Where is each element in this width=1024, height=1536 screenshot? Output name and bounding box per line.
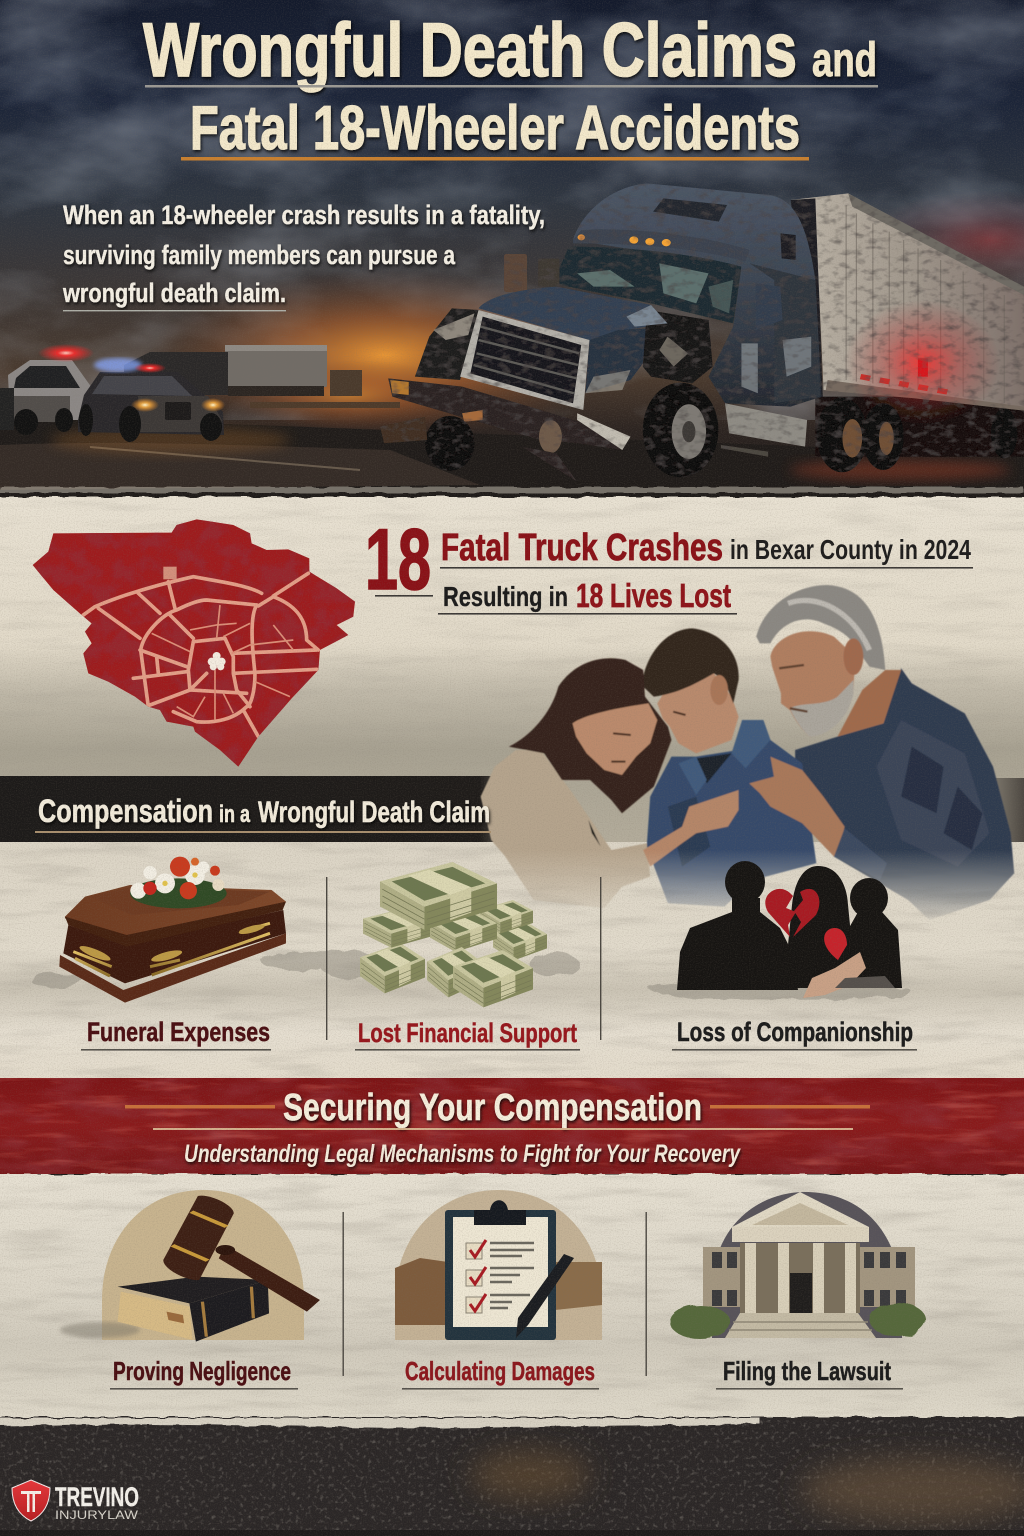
title: Fatal 18-Wheeler Accidents <box>190 94 800 163</box>
center flower marker <box>208 652 226 670</box>
man's hand <box>749 757 887 880</box>
heading: securing your compensation: Securing Your Compensation <box>283 1087 702 1129</box>
label: filing the lawsuit: Filing the Lawsuit <box>723 1356 891 1386</box>
label: loss of companionship: Loss of Companionship <box>677 1017 913 1047</box>
band: compensation heading background <box>0 776 545 842</box>
title <box>143 8 878 163</box>
intro text: When an 18-wheeler crash results in a fatality, <box>63 200 545 230</box>
label: lost financial support: Lost Financial Support <box>358 1018 577 1048</box>
casket handles <box>73 923 270 976</box>
divider <box>326 877 327 1040</box>
background truck box <box>124 345 400 408</box>
bumper <box>388 378 631 450</box>
background: stormy sky hero <box>0 0 1024 495</box>
heading: compensation in a wrongful death claim: Wrongful Death Claim <box>258 796 490 829</box>
crushed front damage <box>585 328 647 393</box>
divider <box>646 1212 647 1376</box>
title: Wrongful Death Claims <box>143 8 797 93</box>
grille <box>460 310 589 410</box>
man <box>756 585 1014 920</box>
book <box>118 1277 268 1303</box>
label: funeral expenses: Funeral Expenses <box>87 1017 270 1047</box>
logo: Trevino Injury Law: INJURYLAW <box>55 1510 138 1522</box>
woman <box>481 658 739 908</box>
small heart <box>824 928 847 960</box>
icon: casket with flowers <box>59 857 286 1003</box>
title: and <box>812 34 877 87</box>
heading: compensation in a wrongful death claim: in a <box>219 801 250 828</box>
front left wheel <box>425 416 474 471</box>
intro text: wrongful death claim. <box>62 278 286 308</box>
icon: gavel and law book <box>60 1188 320 1342</box>
mechanism labels <box>110 1356 903 1390</box>
fuel tank <box>725 403 807 447</box>
mirrors <box>504 254 782 330</box>
divider <box>342 1212 344 1376</box>
heading: compensation in a wrongful death claim <box>35 793 491 833</box>
headline: 18 fatal truck crashes: 18 Lives Lost <box>576 577 731 614</box>
front police car <box>78 358 225 442</box>
logo: Trevino Injury Law: TREVINO <box>55 1482 139 1512</box>
checklist rows <box>466 1240 534 1313</box>
panel: statistics paper background <box>0 497 1024 847</box>
boy <box>643 628 816 907</box>
divider <box>600 877 601 1040</box>
illustration: wrecked semi truck <box>380 183 1024 482</box>
trailer <box>791 193 1024 458</box>
intro text: surviving family members can pursue a <box>63 240 456 270</box>
headline: 18 fatal truck crashes: Fatal Truck Crashes <box>441 527 723 569</box>
windshield <box>552 247 741 323</box>
emergency vehicles scene <box>0 344 400 442</box>
left fender <box>415 308 479 380</box>
headline: 18 fatal truck crashes: Resulting in <box>443 581 568 612</box>
hood <box>479 287 667 340</box>
icon: shield <box>12 1480 50 1521</box>
pen <box>516 1254 574 1338</box>
rear police car <box>0 344 94 435</box>
compensation labels <box>81 1017 917 1051</box>
heading: compensation in a wrongful death claim: Compensation <box>38 793 213 829</box>
logo: Trevino Injury Law <box>12 1480 139 1522</box>
road network <box>83 573 318 737</box>
headline: 18 fatal truck crashes: 18 <box>365 512 431 608</box>
torn edge: top of paper <box>0 487 1024 493</box>
panel: compensation paper background <box>0 842 1024 1080</box>
handle <box>219 1245 320 1312</box>
child's arm <box>803 952 866 998</box>
headline: 18 fatal truck crashes <box>365 512 973 615</box>
rear wheels <box>817 398 904 472</box>
flowers <box>130 857 227 908</box>
subheading: Understanding Legal Mechanisms to Fight for Your Recovery <box>184 1140 741 1168</box>
icon: clipboard checklist <box>393 1188 605 1342</box>
sleeper details <box>573 198 820 403</box>
label: proving negligence: Proving Negligence <box>113 1356 291 1386</box>
gavel head <box>163 1196 234 1280</box>
road surface <box>0 415 1024 495</box>
illustration: grieving family <box>481 585 1014 920</box>
broken heart <box>765 889 796 937</box>
label: calculating damages: Calculating Damages <box>405 1356 595 1386</box>
footer: asphalt band <box>0 1417 1024 1536</box>
icon: silhouettes with broken heart <box>677 861 902 998</box>
brush smudges behind icons <box>30 950 910 1000</box>
icon: courthouse <box>670 1192 926 1339</box>
panel: securing your compensation banner <box>0 1078 1024 1174</box>
panel: legal mechanisms paper background <box>0 1174 1024 1419</box>
map of Bexar County <box>32 519 355 767</box>
front wheel <box>643 383 718 477</box>
debris <box>522 447 577 482</box>
intro text <box>62 200 545 311</box>
icon: stacks of money <box>360 862 547 1007</box>
cab body <box>573 183 822 407</box>
